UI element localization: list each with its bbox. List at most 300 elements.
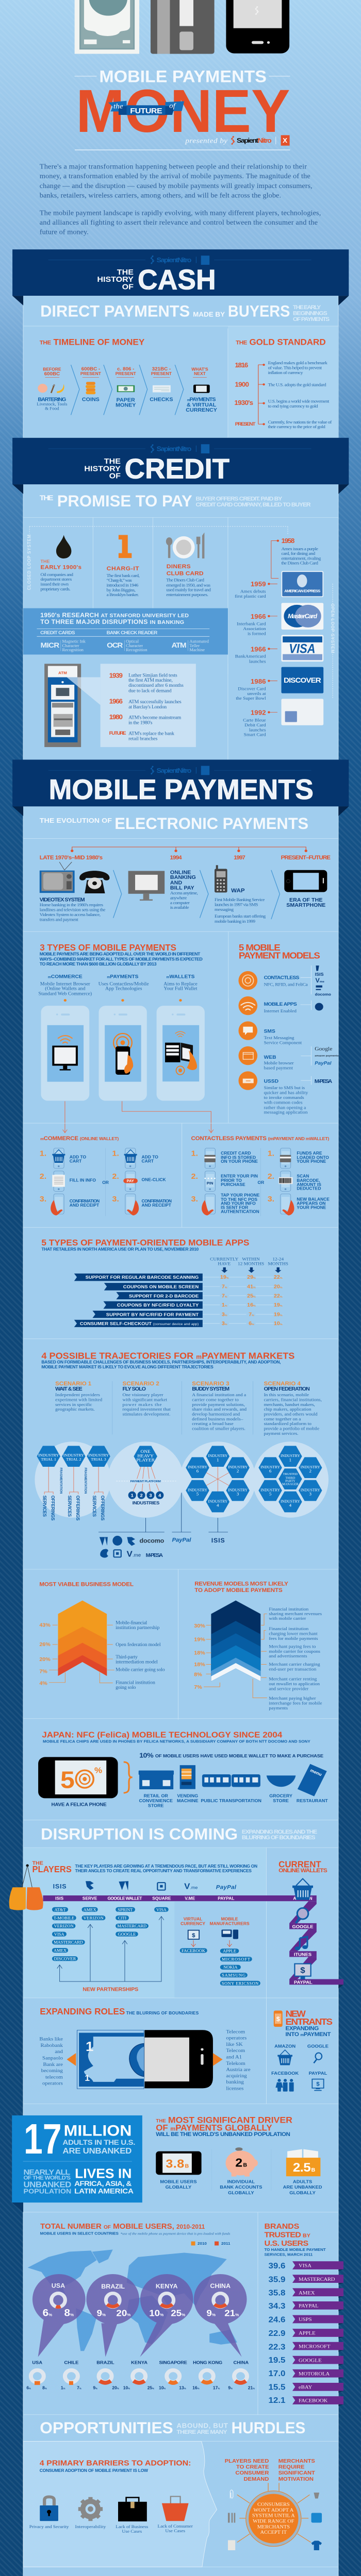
diagram: scenario 4: 5 <box>269 1492 271 1497</box>
stat: unbanked adults: B <box>311 2167 315 2173</box>
panel: atm history: 1966 <box>109 698 123 705</box>
chart: business model chevrons: Third-party <box>116 1655 138 1660</box>
icon: boxing gloves <box>9 1864 43 1910</box>
table: payment-oriented apps: 7% <box>222 1284 227 1290</box>
player logos by scenario <box>99 1493 228 1558</box>
banner: history of cash: SapientNitro <box>157 256 191 264</box>
scenario text blocks: with significant market <box>122 1397 168 1402</box>
chart: revenue model chevrons: fees for mobile payments <box>269 1636 318 1641</box>
current online wallets: $ <box>300 1966 305 1975</box>
partner pills: AMEX <box>84 1908 96 1912</box>
electronic payments timeline: AND <box>170 880 183 886</box>
icon: shopping basket: Lack of Consumer <box>158 2523 193 2529</box>
timeline of money: & VIRTUAL <box>187 402 216 408</box>
chart notes: business model remainder: Financial institution <box>116 1681 155 1686</box>
ribbon: the future of: the <box>113 103 123 110</box>
chart: business model chevrons: 26% <box>39 1642 51 1648</box>
scenario text blocks: In this scenario, mobile <box>264 1392 309 1397</box>
banner: history of credit: SapientNitro <box>157 445 191 452</box>
icon: felica phone 50 percent <box>38 1757 118 1807</box>
chart: revenue model chevrons: Financial institution <box>269 1626 309 1631</box>
credit timeline 1986 and 1992: 1992 <box>251 709 266 716</box>
table: payment-oriented apps: 7% <box>222 1294 227 1299</box>
text: 10 percent of mobile users: OF MOBILE USERS HAVE USED MOBILE WALLET TO MAKE A PURCHASE <box>155 1754 323 1758</box>
flow: contactless payments: ENTER YOUR PIN <box>221 1174 258 1179</box>
felica venue labels: PUBLIC TRANSPORTATION <box>201 1798 261 1803</box>
band: stanford research: Recognition <box>126 648 147 652</box>
table: payment-oriented apps: 22% <box>274 1275 283 1280</box>
icon: barter goods <box>38 384 64 393</box>
table: payment-oriented apps: COUPONS BY NFC/RFID LOYALTY <box>117 1302 199 1308</box>
new entrants: AMAZON <box>274 2044 296 2049</box>
timeline of money: CHECKS <box>150 397 173 402</box>
heading: expanding roles: EXPANDING ROLES <box>40 2007 125 2016</box>
heading: 5 types of payment-oriented apps: THAT RETAILERS IN NORTH AMERICA USE OR PLAN TO USE, NOVEMBER 2010 <box>41 1247 199 1251</box>
credit card timeline: entertainment, rivaling <box>282 556 321 561</box>
text: telecom acquiring banks: acquiring <box>226 2074 247 2079</box>
text: early 1900s: EARLY 1900's <box>41 565 81 571</box>
text: telecom acquiring banks: and A1 <box>226 2055 242 2060</box>
chart notes: revenue model remainder: and service provider <box>269 1686 308 1691</box>
icon: rotary telephone <box>79 871 109 893</box>
chart: trusted brands: 34.3 <box>269 2302 286 2311</box>
flow: mcommerce: ADD TO <box>142 1155 159 1159</box>
panel: atm history: retail branches <box>128 737 158 741</box>
scenario text blocks: standardized platform to <box>264 1421 311 1426</box>
heading: most significant driver: WILL BE THE WORLD'S UNBANKED POPULATION <box>156 2132 290 2138</box>
flow: mcommerce: ADD TO <box>70 1155 87 1159</box>
chart: revenue model chevrons: mobile carrier for coupons <box>269 1649 320 1654</box>
chart: country donuts: 10% <box>159 2386 166 2390</box>
brace <box>124 1762 133 1793</box>
icon: mobile wallet <box>165 1031 197 1075</box>
scenario text blocks: SCENARIO 3 <box>192 1381 229 1387</box>
chart: trusted brands: 22.9 <box>269 2329 286 2338</box>
stat: unbanked adults: ADULTS <box>293 2179 312 2184</box>
flow: mcommerce: 3. <box>112 1195 119 1204</box>
diagram: scenario 3: 1 <box>217 1458 219 1462</box>
panel: atm history: due to lack of demand <box>128 688 172 693</box>
table: payment-oriented apps: 3% <box>222 1312 227 1317</box>
chart notes: revenue model remainder: payments <box>269 1705 288 1710</box>
heading: brands trusted: BY <box>303 2233 310 2239</box>
partner pills: NOKIA <box>223 1965 238 1970</box>
heading: 4 possible trajectories <box>41 1351 294 1369</box>
gold standard timeline: England makes gold a benchmark <box>268 361 327 365</box>
felica venue labels: STORE <box>148 1803 164 1808</box>
gold standard timeline: 1900 <box>235 381 249 388</box>
legend: 2010 and 2011: 2010 <box>198 2241 207 2246</box>
heading: most viable business model: MOST VIABLE BUSINESS MODEL <box>39 1582 134 1588</box>
scenario text blocks: merchants, handset makers, <box>264 1402 315 1407</box>
chart: country donuts: 21% <box>248 2386 255 2390</box>
model: contactless: ISIS <box>315 972 324 977</box>
partner pills: MICROSOFT <box>222 1957 250 1961</box>
text: telecom acquiring banks <box>226 2029 251 2092</box>
flow: contactless payments: YOUR PHONE <box>297 1206 326 1210</box>
map bubbles: countries: 10% <box>149 2308 163 2318</box>
intro paragraphs: and alliances all fighting to assert their relevance and control between the consumer and the <box>40 219 318 226</box>
flow: contactless payments: PURCHASE <box>221 1182 245 1187</box>
text: charg-it: by John Biggins, <box>107 587 136 592</box>
table: payment-oriented apps: 29% <box>247 1275 256 1280</box>
map bubbles: countries: 8% <box>64 2308 74 2318</box>
mobile payment models list: Text Messaging <box>264 1035 294 1040</box>
scenario text blocks: SCENARIO 2 <box>122 1381 159 1387</box>
chart: business model chevrons <box>39 1601 165 1676</box>
partner pills: VISA <box>156 1908 167 1912</box>
heading: 4 primary barriers <box>40 2459 191 2473</box>
electronic payments timeline: LATE 1970's–MID 1980's <box>40 855 103 861</box>
player logos: PayPal <box>216 1885 237 1890</box>
illustration: banknote and phone merge: 1 <box>86 2039 94 2054</box>
chart notes: revenue model remainder <box>194 1672 322 1710</box>
text: charg-it: CHARG-IT <box>107 565 139 572</box>
timeline of money: CURRENCY <box>186 408 217 413</box>
model: contactless <box>238 965 331 996</box>
panel: atm history: the first ATM machine, <box>128 678 173 683</box>
diagram: scenario 3: 2 <box>237 1469 239 1473</box>
new partnerships arrows <box>57 1917 164 1992</box>
band: stanford research: 1950's RESEARCH AT STANFORD UNIVERSITY LED <box>40 612 189 619</box>
chart: trusted brands <box>269 2261 343 2352</box>
text: 10 percent of mobile users: 10% <box>139 1752 154 1759</box>
text: diners club card: DINERS <box>167 563 191 570</box>
chart: country donuts: 10% <box>123 2386 130 2390</box>
banner: history of cash: HISTORY <box>97 276 134 284</box>
chart: business model chevrons: institution partnership <box>116 1625 160 1631</box>
electronic payments timeline <box>40 847 331 924</box>
mobile payment type labels: Uses Contactless/Mobile <box>99 982 149 987</box>
diagram: scenario 3: INDUSTRY <box>208 1453 228 1458</box>
diagram: scenario 2: ONE <box>141 1449 151 1454</box>
intro paragraphs: There's a major transformation happening between people and their relationship to their <box>40 163 307 170</box>
new entrants: FACEBOOK <box>271 2071 299 2076</box>
new partnerships arrows: NEW PARTNERSHIPS <box>83 1987 138 1992</box>
electronic payments timeline: a computer <box>170 900 190 905</box>
flow: contactless payments: CONTACTLESS PAYMENTS (mPAYMENT AND mWALLET) <box>191 1136 329 1142</box>
heading: the players: THEIR ANGLES TO CREATE REAL OPPORTUNITY AND TRANSFORMATIVE EXPERIENCES <box>75 1869 252 1873</box>
electronic payments timeline: transfers and payment <box>40 917 78 922</box>
heading: gold standard: THE <box>236 340 248 346</box>
felica venue labels: CONVENIENCE <box>139 1798 173 1803</box>
flow: contactless payments: PIN <box>207 1181 213 1185</box>
stat: bank accounts: B <box>243 2163 247 2168</box>
partner pills: T-MOBILE <box>54 1916 74 1920</box>
felica venue labels: MACHINE <box>177 1798 199 1803</box>
chart: trusted brands: VISA <box>299 2263 312 2269</box>
diagram: scenario 1 <box>37 1446 110 1520</box>
heading: direct payments made by buyers: BUYERS <box>228 301 290 320</box>
stat: mobile users <box>156 2151 202 2190</box>
mobile payment models list: Mobile browser <box>264 1060 294 1065</box>
text: banks becoming telecom: Sanpaolo <box>42 2056 63 2061</box>
table: payment-oriented apps: 16% <box>247 1302 256 1308</box>
label: open loop system: OPEN LOOP SYSTEM <box>330 603 335 653</box>
diagram: scenario 1: INDUSTRY <box>63 1453 84 1458</box>
chart: trusted brands: 24.6 <box>269 2315 286 2325</box>
electronic payments timeline: Home banking in the 1980's requires <box>40 902 103 907</box>
heading: 4 primary barriers: 4 PRIMARY BARRIERS TO ADOPTION: <box>40 2459 191 2467</box>
icon: shopping basket: Use Cases <box>165 2528 186 2533</box>
icon: banknote <box>75 0 139 54</box>
credit timeline 1986 and 1992: 1986 <box>251 677 266 685</box>
stat: bank accounts <box>220 2147 262 2195</box>
heading: evolution of electronic payments <box>40 814 308 833</box>
partner pills: VISA <box>54 1932 64 1937</box>
heading: timeline of money: TIMELINE OF MONEY <box>54 337 145 347</box>
heading: evolution of electronic payments: THE EVOLUTION OF <box>40 817 112 824</box>
gold standard timeline: 1930's <box>234 399 253 406</box>
logo: mastercard <box>282 603 323 630</box>
text: players and merchants: PLAYERS NEED <box>225 2458 269 2464</box>
flow: contactless payments: NEW BALANCE <box>297 1197 330 1201</box>
electronic payments timeline: BILL PAY <box>170 886 194 891</box>
purple band with players: V.ME <box>185 1896 195 1901</box>
chart notes: revenue model remainder: Merchant paying higher <box>269 1696 316 1701</box>
gold standard timeline <box>234 361 332 429</box>
heading: most significant driver: OF mPAYMENTS GLOBALLY <box>156 2123 272 2132</box>
title: money: MONEY <box>76 77 290 145</box>
stat: mobile users: 3.8 <box>166 2157 184 2171</box>
panel: head profile <box>23 2442 217 2567</box>
mobile payment models list: USSD <box>264 1079 278 1084</box>
callout: 17 million unbanked: LIVES IN <box>75 2166 132 2181</box>
text: telecom acquiring banks: like SK <box>226 2042 243 2047</box>
chart: country donuts: CHILE <box>64 2360 78 2365</box>
model: contactless: NFC, RFID, and FeliCa <box>264 982 308 987</box>
chart: trusted brands: PAYPAL <box>299 2303 319 2309</box>
heading: brands trusted: TRUSTED <box>264 2231 301 2240</box>
diagram: scenario 3: INDUSTRY <box>188 1488 208 1492</box>
credit card timeline: 1966 <box>251 613 266 620</box>
player logos <box>53 1881 237 1891</box>
electronic payments timeline: First Mobile Banking Service <box>215 897 265 902</box>
partner pills: VERIZON <box>84 1916 104 1920</box>
gold standard timeline: 1816 <box>235 361 248 369</box>
callout: 17 million unbanked: POPULATION <box>24 2188 71 2195</box>
credit card timeline <box>235 537 323 664</box>
band: stanford research: Teller <box>189 643 200 648</box>
scenario text blocks: required investment that <box>122 1406 171 1412</box>
chart: country donuts: 25% <box>147 2386 154 2390</box>
stat: unbanked adults: GLOBALLY <box>289 2190 316 2195</box>
mobile payment type labels <box>38 974 198 1002</box>
credit card timeline: card, for dining and <box>282 551 316 556</box>
intro paragraphs: money, a transformation enabled by the arrival of mobile payments. The magnitude of the <box>40 173 310 180</box>
heading: total number of mobile users: MOBILE USERS IN SELECT COUNTRIES <box>40 2231 119 2236</box>
mobile payment models list: to invoke commands <box>264 1095 304 1100</box>
illustration: three phones <box>41 1006 205 1101</box>
electronic payments timeline: 1994 <box>170 855 182 861</box>
chart: country donuts: 17% <box>213 2386 220 2390</box>
heading: most significant driver: THE <box>156 2119 166 2124</box>
model: contactless: CONTACTLESS <box>264 975 300 980</box>
heading: japan felica: JAPAN: NFC (FeliCa) MOBILE TECHNOLOGY SINCE 2004 <box>42 1731 283 1739</box>
flow: contactless payments: 3. <box>268 1195 274 1204</box>
current online wallets: PAYPAL <box>294 1980 313 1985</box>
new entrants: GOOGLE <box>307 2044 329 2049</box>
flow: mcommerce: CART <box>70 1159 81 1163</box>
map bubbles: countries <box>32 2274 247 2357</box>
new entrants: $ <box>316 2081 320 2087</box>
callout: 17 million unbanked <box>12 2115 142 2212</box>
credit timeline 1986 and 1992: Debit Card <box>244 722 266 727</box>
world map <box>28 2249 237 2351</box>
map bubbles: countries: USA <box>52 2282 65 2289</box>
chart: business model chevrons: intermediation model <box>116 1660 158 1665</box>
table: payment-oriented apps: 19% <box>274 1312 283 1317</box>
heading: most significant driver <box>156 2115 293 2138</box>
mobile payment type labels: Mobile Internet Browser <box>40 982 91 987</box>
heading: most significant driver: MOST SIGNIFICANT DRIVER <box>168 2115 293 2125</box>
icon: computer commerce <box>52 1036 78 1071</box>
flow: mcommerce: OR <box>102 1180 109 1185</box>
diagram: scenario 1: SERVICES <box>92 1496 97 1517</box>
credit card timeline: first plastic card <box>235 594 266 599</box>
heading: timeline of money: THE <box>40 340 52 346</box>
icon: contactless phone <box>113 1033 133 1075</box>
chart: country donuts: CHINA <box>234 2360 249 2365</box>
electronic payments timeline: launches in 1997 via SMS <box>215 902 258 907</box>
heading: total number of mobile users: TOTAL NUMBER OF MOBILE USERS, 2010-2011 <box>40 2223 205 2231</box>
chart: trusted brands continued: GOOGLE <box>299 2358 322 2363</box>
map bubbles: countries: CHINA <box>210 2282 231 2290</box>
panel: atm history: 1939 <box>109 672 123 680</box>
credit card timeline: is formed <box>248 631 266 636</box>
flow: mcommerce: ONE-CLICK <box>142 1178 166 1182</box>
panel: atm history: Luther Simjian field tests <box>128 673 177 678</box>
chart: revenue model chevrons: Merchant paying fees to <box>269 1644 316 1649</box>
icon: menu <box>298 1764 327 1797</box>
mobile payment type labels: mWALLETS <box>167 974 195 979</box>
current online wallets: CURRENT <box>278 1859 321 1869</box>
callout: 17 million unbanked: 17 <box>24 2115 62 2163</box>
heading: revenue models <box>194 1581 288 1594</box>
chart: business model chevrons: 43% <box>39 1623 51 1628</box>
panel: atm history: at Barclay's London <box>128 705 167 710</box>
timeline of money: c. 806 - <box>117 367 134 372</box>
table: payment-oriented apps: 10% <box>274 1321 283 1327</box>
new entrants: ENTRANTS <box>286 2016 333 2027</box>
credit card timeline: 1959 <box>251 580 266 588</box>
callout: 17 million unbanked: UNBANKED <box>24 2180 72 2189</box>
chart: country donuts: 16% <box>192 2386 200 2390</box>
gold standard timeline: inflation of currency <box>268 370 303 375</box>
flow: mcommerce: 2. <box>112 1173 119 1181</box>
mobile payment models list: with common codes <box>264 1100 303 1105</box>
table: payment-oriented apps: 25% <box>247 1294 256 1299</box>
heading: brands trusted: BRANDS <box>264 2223 299 2231</box>
chart: revenue model chevrons: and advertisements <box>269 1653 307 1658</box>
heading: the players: THE KEY PLAYERS ARE GROWING AT A TREMENDOUS PACE, BUT ARE STILL WORKING ON <box>75 1864 257 1869</box>
text: early 1900s: issued their own <box>41 582 69 587</box>
electronic payments timeline: landlines and television sets using the <box>40 907 105 912</box>
flow: contactless payments: 2. <box>268 1173 274 1181</box>
table: payment-oriented apps: 22% <box>274 1294 283 1299</box>
chart: country donuts: KENYA <box>131 2360 148 2365</box>
callout: 17 million unbanked: OF THE WORLD'S <box>24 2175 71 2181</box>
chart: revenue model chevrons: 30% <box>194 1623 205 1629</box>
credit timeline 1986 and 1992: unveils at <box>247 691 266 696</box>
credit timeline 1986 and 1992: Smart Card <box>244 732 266 737</box>
partner pills: AT&T <box>54 1908 66 1912</box>
heading: disruption is coming: BLURRING OF BOUNDARIES <box>242 1834 316 1841</box>
scenario text blocks: OPEN FEDERATION <box>264 1386 310 1392</box>
partner pills: GOOGLE <box>118 1932 136 1937</box>
diagram: scenario 1: FRAGMENTATION <box>59 1468 62 1494</box>
panel: gold standard column <box>228 326 338 438</box>
text: telecom acquiring banks: Telecom <box>226 2029 245 2035</box>
credit timeline 1986 and 1992: the Super Bowl <box>236 696 266 701</box>
diagram: scenario 2: 3 <box>149 1493 152 1498</box>
diagram: scenario 1: TRIAL 3 <box>91 1457 106 1462</box>
heading: 3 types of mobile payments <box>40 943 203 967</box>
partner pills: CITI <box>118 1916 127 1920</box>
icon: smartphone <box>226 0 289 54</box>
heading: direct payments made by buyers: DIRECT PAYMENTS <box>40 301 190 320</box>
icon: coins <box>86 382 95 394</box>
scenario text blocks: carrier come together to <box>192 1397 239 1402</box>
purple band with players: GOOGLE WALLET <box>107 1896 142 1901</box>
title: mobile payments: MOBILE PAYMENTS <box>99 68 267 86</box>
chart: trusted brands continued: 19.5 <box>269 2356 286 2365</box>
text: early 1900s: THE <box>41 559 50 564</box>
scenario text blocks: experiment with limited <box>55 1397 103 1402</box>
chart: trusted brands: 35.8 <box>269 2289 286 2297</box>
chart: country donuts: 7% <box>77 2386 81 2390</box>
diagram: scenario 3: 5 <box>196 1492 199 1497</box>
electronic payments timeline: messaging <box>215 907 234 912</box>
heading: direct payments made by buyers: MADE BY <box>193 311 225 318</box>
electronic payments timeline: is available <box>170 905 189 910</box>
heading: opportunities and hurdles: HURDLES <box>232 2418 305 2437</box>
flow: contactless payments: DEDUCTED <box>297 1187 321 1191</box>
flow: contactless payments: YOUR PHONE <box>297 1159 326 1164</box>
text: diners club card <box>166 563 211 597</box>
text: charg-it <box>107 565 140 597</box>
text: diners club card: CLUB CARD <box>167 570 204 577</box>
electronic payments timeline: mobile banking in 1999 <box>215 919 256 924</box>
text: charg-it: “Charg-It,” was <box>107 578 132 583</box>
icon: check <box>153 385 171 393</box>
flow: contactless payments: AND YOUR INFO <box>221 1201 256 1206</box>
flow: contactless payments: CREDIT CARD <box>221 1151 251 1156</box>
chart: country donuts: HONG KONG <box>193 2360 222 2365</box>
purple band with players: ISIS <box>55 1896 64 1901</box>
stat: bank accounts: 2 <box>235 2156 242 2170</box>
chart: revenue model chevrons: Merchant carrier charging <box>269 1662 320 1667</box>
illustration: banknote and phone merge <box>77 2030 213 2089</box>
table: payment-oriented apps: MONTHS <box>268 1261 288 1266</box>
intro paragraphs: future of money. <box>40 228 89 236</box>
band: stanford research: Magnetic Ink <box>62 639 86 644</box>
text: players and merchants: MOTIVATION <box>278 2476 314 2482</box>
heading: the promise to pay: PROMISE TO PAY <box>57 492 192 510</box>
scenario text blocks: Independent providers <box>55 1392 100 1397</box>
flow: contactless payments: 2. <box>191 1173 198 1181</box>
icon: phone <box>193 385 210 393</box>
diagram: consumer adoption circle: WON'T ADOPT A <box>253 2507 294 2513</box>
icon: gear <box>75 2497 106 2529</box>
chart: trusted brands continued: FACEBOOK <box>299 2398 328 2404</box>
credit timeline 1986 and 1992: Carte Bleue <box>243 718 266 722</box>
illustration: banknote and phone merge: 1 <box>85 2073 90 2083</box>
heading: brands trusted: U.S. USERS <box>264 2239 308 2248</box>
heading: opportunities and hurdles: OPPORTUNITIES <box>40 2418 173 2437</box>
partner pills: VERIZON <box>54 1924 74 1928</box>
banner: mobile payments <box>12 760 349 816</box>
